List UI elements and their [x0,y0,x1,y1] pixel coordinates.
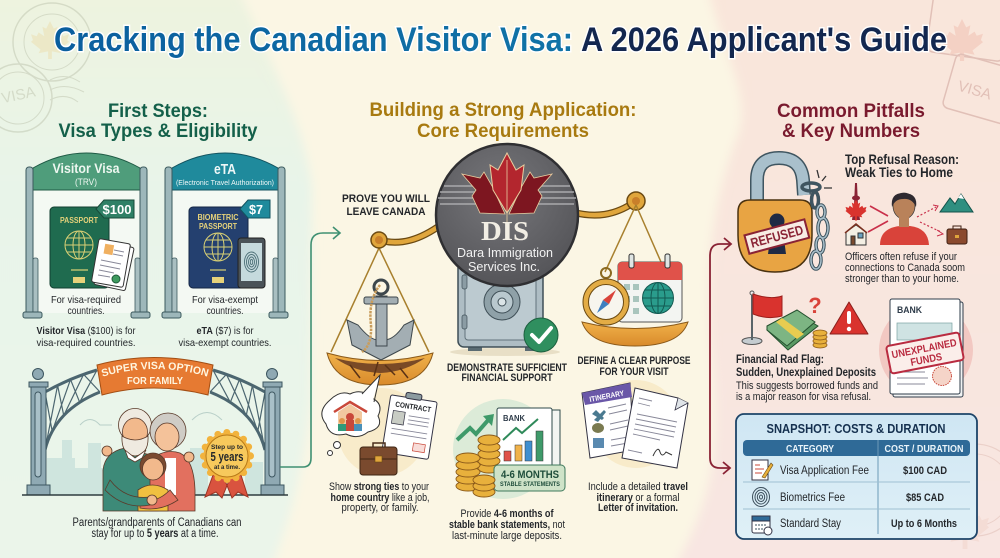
table title: SNAPSHOT: COSTS & DURATION [766,421,946,436]
text: bank statements: Provide 4-6 months of [460,508,566,520]
right pillar [261,368,284,495]
stamps, top right [926,0,1000,127]
heading: building a strong application: Building a Strong Application: [370,99,636,121]
text: itinerary: Include a detailed travel [588,481,693,493]
icon: biometric passport: BIOMETRIC [198,213,239,222]
text: officers often refuse: Officers often refuse if your [845,251,957,263]
text: for visa-exempt countries: For visa-exempt [192,294,258,306]
scale: left pan with anchor [327,248,433,385]
heading: top refusal reason: Weak Ties to Home [845,164,953,180]
text: for visa-required countries: countries. [68,305,104,317]
stamp, bottom right [929,444,1000,549]
icon: green passport: PASSPORT [60,216,98,225]
icon: green check [524,318,558,352]
text: parents and grandparents: Parents/grandparents of Canadians can [72,517,242,529]
text: itinerary: itinerary or a formal [596,492,689,504]
illustration: family [102,408,195,511]
eTA header text: eTA [214,161,236,178]
icon: person [880,193,929,245]
icon: green passport [50,207,109,288]
table header: CATEGORY [786,443,834,455]
illustration: bank statements and coins: STABLE STATEMENTS [500,482,560,488]
title: Cracking the Canadian Visitor Visa: [54,21,573,59]
scale: right pan with calendar and compass [582,205,688,346]
icon: tower and maple leaf [846,183,866,220]
arrow: red connector [710,238,731,474]
logo: Dara Immigration Services [436,144,578,286]
contract: CONTRACT [395,400,432,414]
banner: super visa option [96,357,214,396]
label: demonstrate sufficient financial support: FINANCIAL SUPPORT [462,372,553,384]
card: visitor visa [23,153,150,318]
illustration: unexplained funds statement: BANK [897,305,922,315]
text: for visa-required countries: For visa-required [51,294,121,306]
text: for visa-exempt countries: countries. [206,305,244,317]
text: financial red flag: Financial Rad Flag: [736,352,824,366]
banner: super visa option: FOR FAMILY [127,375,183,387]
illustration: bank statements and coins: 4-6 MONTHS [501,469,559,481]
icon: phone with fingerprint [238,238,265,288]
scale: beams [371,192,645,248]
text: itinerary: Letter of invitation. [598,502,678,514]
passport stamps, top left [0,3,91,132]
row: biometrics fee: $85 CAD [906,492,944,504]
logo: Dara Immigration Services: DIS [481,216,529,246]
logo: Dara Immigration Services: Dara Immigration [457,246,553,260]
icon: red flag and money [742,291,868,350]
illustration: itinerary and letter [582,380,688,468]
heading: building a strong application: Core Requirements [417,120,589,142]
icon: refused padlock: REFUSED [749,222,805,251]
text: financial red flag: Sudden, Unexplained Deposits [736,365,876,379]
icon: biometric passport: PASSPORT [199,222,237,231]
illustration: super visa arch [22,357,288,512]
table: snapshot costs and duration [736,414,977,539]
illustration: unexplained funds statement [879,299,973,397]
text: visitor visa note: Visitor Visa ($100) is for [36,325,144,337]
icon: biometric passport [189,207,248,288]
text: officers often refuse: connections to Canada soom [845,262,965,274]
badge: step up to 5 years: Step up to [211,444,243,451]
price tag $100 [96,200,134,218]
icon: red flag and money: ? [808,293,822,318]
illustration: unexplained funds statement: FUNDS [909,351,943,369]
lines [868,206,888,232]
logo: Dara Immigration Services: Services Inc. [468,260,540,274]
card: eTA [162,153,288,318]
text: eTA note: eTA ($7) is for [196,325,260,337]
text: strong ties: Show strong ties to your [329,481,436,493]
row: biometrics fee [752,488,944,506]
eTA header text: (Electronic Travel Authorization) [176,180,274,187]
illustration: ties to home [322,375,438,476]
banner: super visa option: SUPER VISA OPTION [102,362,209,376]
icon: safe [450,262,560,356]
heading: common pitfalls: Common Pitfalls [777,100,925,122]
table header: COST / DURATION [884,443,964,455]
illustration: unexplained funds statement: UNEXPLAINED [891,337,958,361]
label: define a clear purpose: FOR YOUR VISIT [600,366,669,378]
label: prove you will leave canada: LEAVE CANADA [346,206,426,218]
price tag $100: $100 [102,202,132,217]
text: parents and grandparents: stay for up to 5 years at a time. [92,528,229,540]
illustration: itinerary and letter: ITINERARY [589,388,625,404]
badge: step up to 5 years: 5 years [210,450,244,464]
heading: first steps: Visa Types & Eligibility [58,120,258,142]
icon: refused padlock [738,158,832,272]
heading: top refusal reason: Top Refusal Reason: [845,151,959,167]
text: financial red flag: This suggests borrowed funds and [736,380,878,392]
text: officers often refuse: stronger than to your home. [845,273,959,285]
row: standard stay: Standard Stay [780,518,841,530]
text: visitor visa note: visa-required countries. [36,337,136,349]
row: biometrics fee: Biometrics Fee [780,492,845,504]
heading: common pitfalls: & Key Numbers [782,120,920,142]
text: strong ties: property, or family. [342,502,418,514]
illustration: weak ties [845,183,973,245]
row: visa application fee: $100 CAD [903,465,947,477]
text: strong ties: home country like a job, [330,492,439,504]
row: visa application fee: Visa Application Fee [780,465,869,477]
heading: first steps: First Steps: [108,100,208,122]
row: standard stay [752,516,957,535]
badge: step up to 5 years: at a time. [214,465,240,471]
text: financial red flag [736,352,878,403]
icon: mountains [940,194,973,212]
label: prove you will leave canada: PROVE YOU WILL [342,193,430,205]
icon: documents [91,239,134,291]
price tag $7: $7 [249,202,263,217]
visitor visa header text: (TRV) [75,177,97,187]
row: standard stay: Up to 6 Months [891,518,957,530]
stamps, top right: VISA [956,78,993,104]
text: eTA note: visa-exempt countries. [178,337,272,349]
briefcase [360,443,397,475]
icon: small briefcase [947,226,967,244]
label: demonstrate sufficient financial support: DEMONSTRATE SUFFICIENT [447,362,567,374]
passport stamps, top left: VISA [0,83,37,107]
text: bank statements: stable bank statements, not [449,519,574,531]
label: define a clear purpose: DEFINE A CLEAR PURPOSE [578,355,690,367]
arrow: green connector [280,227,340,467]
badge: step up to 5 years [204,432,250,498]
text: financial red flag: is a major reason for visa refusal. [736,391,871,403]
table header [743,440,970,456]
title: A 2026 Applicant's Guide [581,21,947,59]
illustration: bank statements and coins [453,399,565,499]
price tag $7 [240,200,270,218]
text: bank statements: last-minute large deposits. [452,530,562,542]
row: visa application fee [752,460,947,480]
panel: common pitfalls [736,100,977,539]
panel: first steps [22,100,288,540]
icon: house [845,224,867,245]
left pillar [27,368,50,495]
panel: core requirements [322,99,690,542]
visitor visa header text: Visitor Visa [52,160,120,176]
illustration: bank statements and coins: BANK [503,413,526,423]
